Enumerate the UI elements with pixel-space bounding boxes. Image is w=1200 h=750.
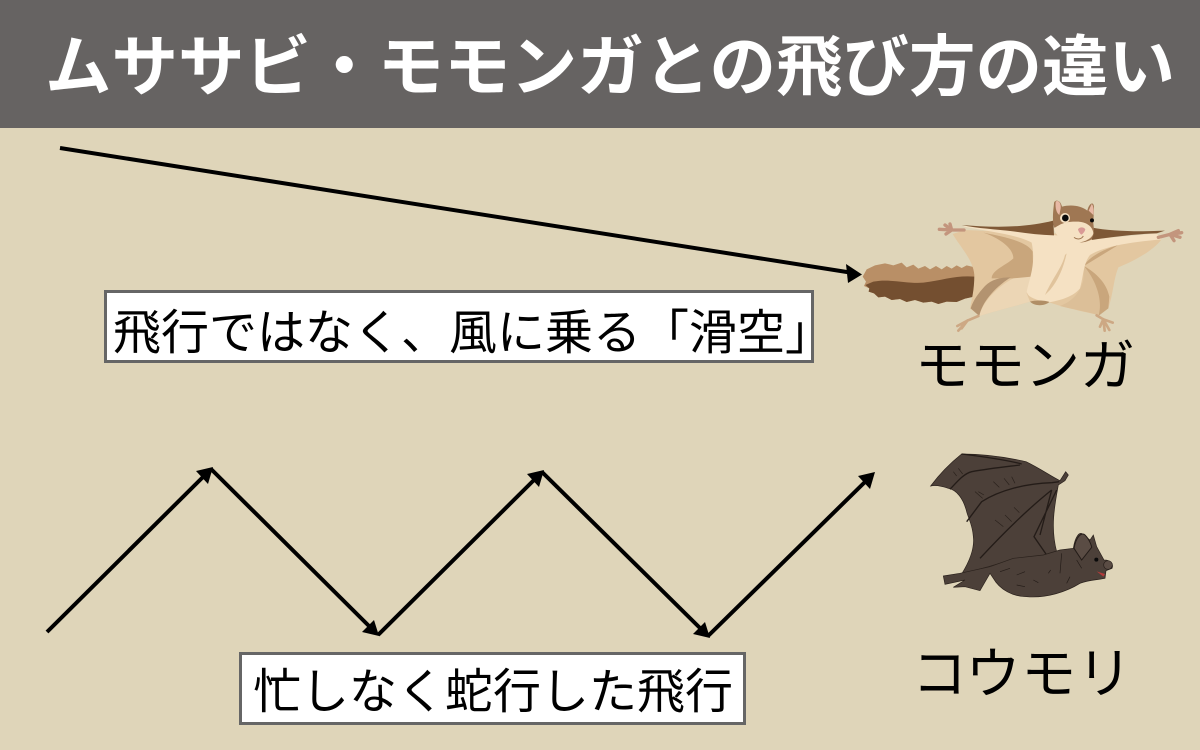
squirrel paws	[939, 224, 1182, 331]
arrow: zigzag flight path	[47, 467, 875, 638]
label: momonga: モモンガ	[915, 335, 1135, 397]
bat body	[943, 533, 1113, 597]
arrow: straight glide path	[60, 148, 862, 283]
squirrel head	[1053, 201, 1094, 243]
callout: gliding: 飛行ではなく、風に乗る「滑空」	[113, 307, 833, 360]
icon: bat	[931, 454, 1113, 597]
title: ムササビ・モモンガとの飛び方の違い	[45, 31, 1175, 105]
icon: flying squirrel	[863, 201, 1182, 331]
squirrel tail	[863, 263, 975, 304]
callout: zigzag flight: 忙しなく蛇行した飛行	[253, 666, 733, 719]
squirrel patagium and body	[953, 221, 1165, 316]
title band	[0, 0, 1200, 128]
label: bat: コウモリ	[912, 643, 1132, 705]
bat wing	[931, 454, 1068, 574]
